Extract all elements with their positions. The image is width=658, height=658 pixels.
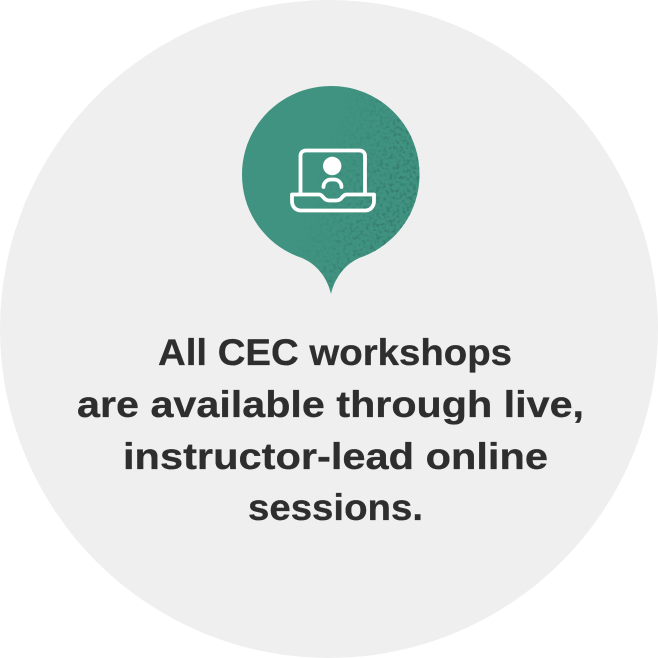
icon: laptop with person [292,150,374,210]
text block: message: sessions. [248,487,423,528]
text block: message: All CEC workshops [158,332,512,373]
text block: message: are available through live, [77,384,584,425]
icon: map pin marker [242,86,420,294]
text block: message [77,332,584,528]
text block: message: instructor-lead online [123,436,548,477]
